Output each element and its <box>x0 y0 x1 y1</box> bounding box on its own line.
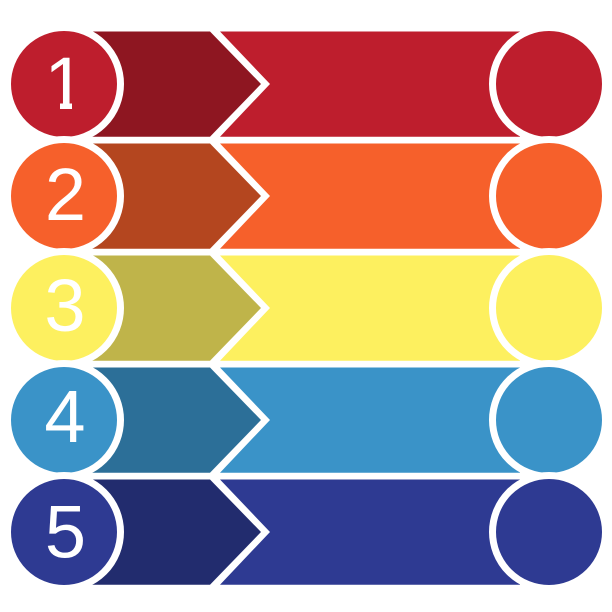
row 1 <box>8 28 606 140</box>
row 1 number: 1 <box>44 42 86 125</box>
row 5 number circle <box>8 476 120 588</box>
row 2 <box>8 140 606 252</box>
row 1 arrow <box>90 32 261 137</box>
row 1 band <box>220 32 520 137</box>
row 5 band <box>220 480 520 585</box>
row 4 <box>8 364 606 476</box>
row 2 band <box>220 144 520 249</box>
row 4 number: 4 <box>44 375 86 458</box>
row 3 arrow <box>90 256 261 361</box>
row 4 right circle <box>492 364 606 476</box>
row 4 band <box>220 368 520 473</box>
row 1 number circle <box>8 28 120 140</box>
row 3 band <box>220 256 520 361</box>
row 5 right circle <box>492 476 606 588</box>
row 2 arrow <box>90 144 261 249</box>
row 3 <box>8 252 606 364</box>
row 5 number: 5 <box>45 490 86 574</box>
row 2 right circle <box>492 140 606 252</box>
row 4 number circle <box>8 364 120 476</box>
row 5 <box>8 476 606 588</box>
row 5 arrow <box>90 480 261 585</box>
row 3 number circle <box>8 252 120 364</box>
row 2 number: 2 <box>45 153 86 236</box>
row 3 right circle <box>492 252 606 364</box>
row 3 number: 3 <box>44 264 86 347</box>
row 2 number circle <box>8 140 120 252</box>
row 1 right circle <box>492 28 606 140</box>
row 4 arrow <box>90 368 261 473</box>
